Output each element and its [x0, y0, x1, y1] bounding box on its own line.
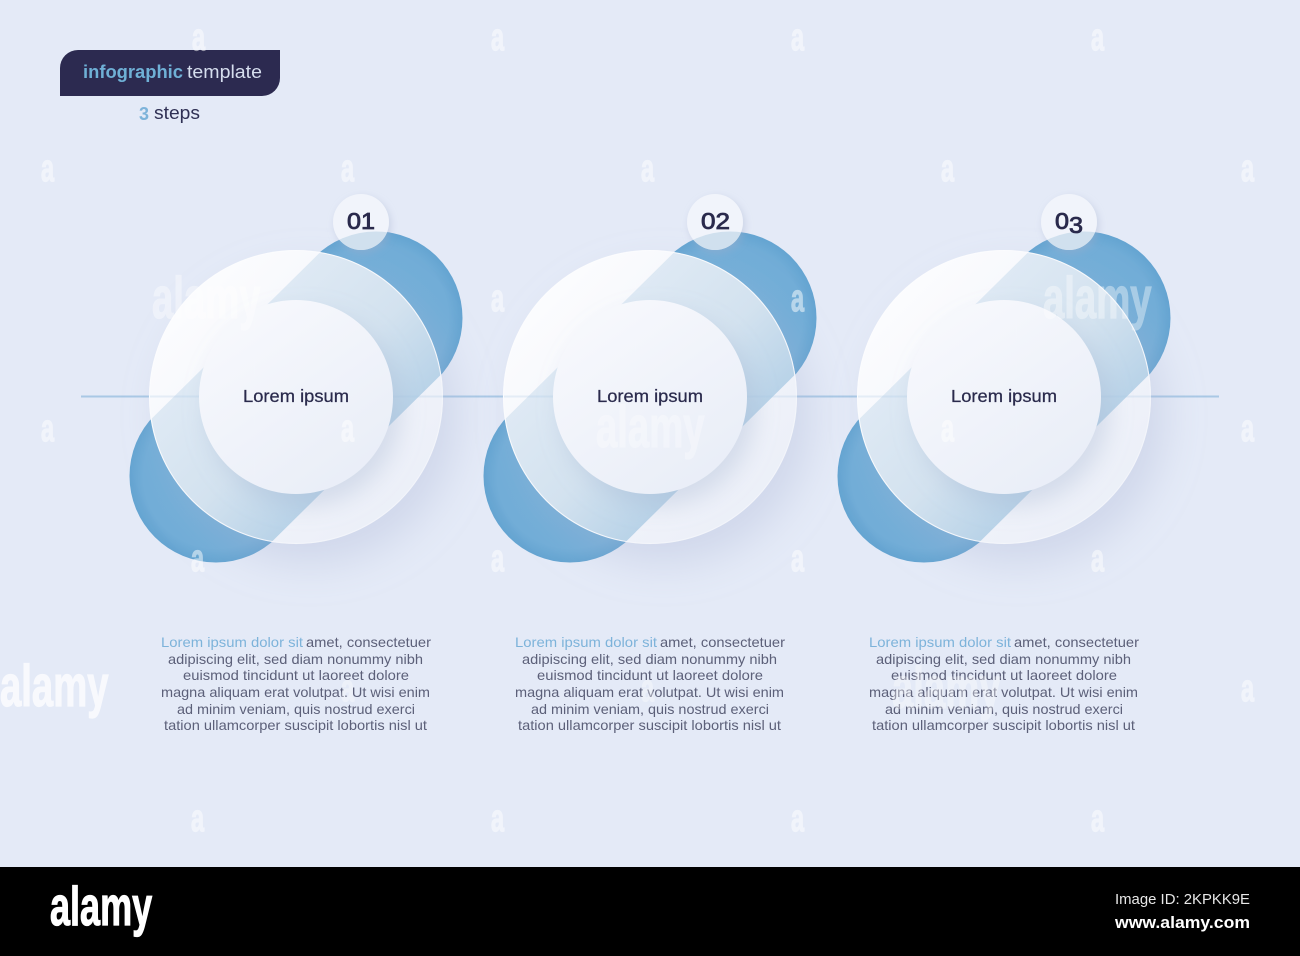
step 2 description: tation ullamcorper suscipit lobortis nisl ut — [518, 717, 781, 733]
step 3 description: tation ullamcorper suscipit lobortis nisl ut — [872, 717, 1135, 733]
step 1 description: magna aliquam erat volutpat. Ut wisi enim — [161, 684, 430, 700]
stock photo watermarks: a — [1241, 666, 1254, 709]
subtitle: 3 steps — [139, 103, 200, 124]
step 1 description: adipiscing elit, sed diam nonummy nibh — [168, 651, 423, 667]
stock photo watermarks: a — [191, 796, 204, 839]
step 3 description: Lorem ipsum dolor sit — [869, 634, 1011, 650]
step 2 description — [515, 634, 785, 733]
stock photo watermarks: a — [1091, 796, 1104, 839]
stock photo watermarks: a — [41, 146, 54, 189]
step 3 description: amet, consectetuer — [1014, 634, 1139, 650]
step 3 label: Lorem ipsum — [951, 386, 1057, 406]
step 2 description: ad minim veniam, quis nostrud exerci — [531, 701, 769, 717]
step 3 description: magna aliquam erat volutpat. Ut wisi enim — [869, 684, 1138, 700]
footer logo: alamy — [50, 875, 152, 937]
stock photo watermarks: a — [1241, 146, 1254, 189]
step 1 label: Lorem ipsum — [243, 386, 349, 406]
step 3 diagram — [838, 194, 1170, 562]
stock photo watermarks: a — [941, 406, 954, 449]
step 2 description: Lorem ipsum dolor sit — [515, 634, 657, 650]
stock photo watermarks: a — [341, 146, 354, 189]
stock photo watermarks: a — [341, 666, 354, 709]
stock photo watermarks: a — [1091, 15, 1104, 58]
step 1 number badge — [333, 194, 392, 254]
title banner: infographic — [83, 62, 183, 82]
image id: Image ID: 2KPKK9E — [1115, 891, 1250, 908]
stock photo watermarks: a — [491, 796, 504, 839]
footer bar — [0, 867, 1300, 956]
stock photo watermarks: a — [341, 406, 354, 449]
step 2 diagram — [484, 194, 816, 562]
stock photo watermarks: a — [791, 796, 804, 839]
stock photo watermarks: a — [1241, 406, 1254, 449]
stock photo watermarks: a — [791, 536, 804, 579]
step 1 number badge: 01 — [347, 208, 375, 234]
step 3 description: ad minim veniam, quis nostrud exerci — [885, 701, 1123, 717]
step 3 description — [869, 634, 1139, 733]
subtitle: 3 steps: 3 — [139, 104, 149, 124]
website: www.alamy.com — [1114, 913, 1250, 932]
step 2 description: magna aliquam erat volutpat. Ut wisi enim — [515, 684, 784, 700]
stock photo watermarks: alamy — [892, 657, 1001, 721]
stock photo watermarks: a — [791, 15, 804, 58]
step 1 description — [161, 634, 431, 733]
stock photo watermarks: alamy — [152, 267, 261, 331]
step 3 description: euismod tincidunt ut laoreet dolore — [891, 667, 1117, 683]
stock photo watermarks: a — [1091, 536, 1104, 579]
stock photo watermarks: a — [491, 15, 504, 58]
step 2 label: Lorem ipsum — [597, 386, 703, 406]
step 1 description: ad minim veniam, quis nostrud exerci — [177, 701, 415, 717]
timeline line — [81, 396, 1219, 398]
step 1 description: tation ullamcorper suscipit lobortis nisl ut — [164, 717, 427, 733]
step 2 description: amet, consectetuer — [660, 634, 785, 650]
stock photo watermarks: a — [41, 406, 54, 449]
step 2 description: adipiscing elit, sed diam nonummy nibh — [522, 651, 777, 667]
step 1 description: amet, consectetuer — [306, 634, 431, 650]
stock photo watermarks: a — [941, 146, 954, 189]
stock photo watermarks: a — [641, 666, 654, 709]
step 2 number badge: 02 — [701, 208, 730, 234]
step 3 number badge — [1041, 194, 1100, 254]
stock photo watermarks: a — [192, 15, 205, 58]
title banner: template — [187, 62, 262, 82]
step 2 description: euismod tincidunt ut laoreet dolore — [537, 667, 763, 683]
step 1 description: Lorem ipsum dolor sit — [161, 634, 303, 650]
step 3 number badge: 0 — [1055, 208, 1068, 234]
stock photo watermarks: a — [791, 276, 804, 319]
stock photo watermarks: a — [641, 146, 654, 189]
stock photo watermarks: alamy — [596, 396, 705, 460]
step 3 number badge: 3 — [1069, 212, 1083, 238]
title banner — [60, 50, 280, 96]
step 1 diagram — [130, 194, 462, 562]
stock photo watermarks: a — [491, 536, 504, 579]
stock photo watermarks: a — [191, 536, 204, 579]
stock photo watermarks: a — [491, 276, 504, 319]
stock photo watermarks: alamy — [1043, 267, 1152, 331]
step 2 number badge — [687, 194, 746, 254]
step 1 description: euismod tincidunt ut laoreet dolore — [183, 667, 409, 683]
step 3 description: adipiscing elit, sed diam nonummy nibh — [876, 651, 1131, 667]
subtitle: 3 steps: steps — [154, 103, 200, 123]
stock photo watermarks: alamy — [0, 655, 109, 719]
